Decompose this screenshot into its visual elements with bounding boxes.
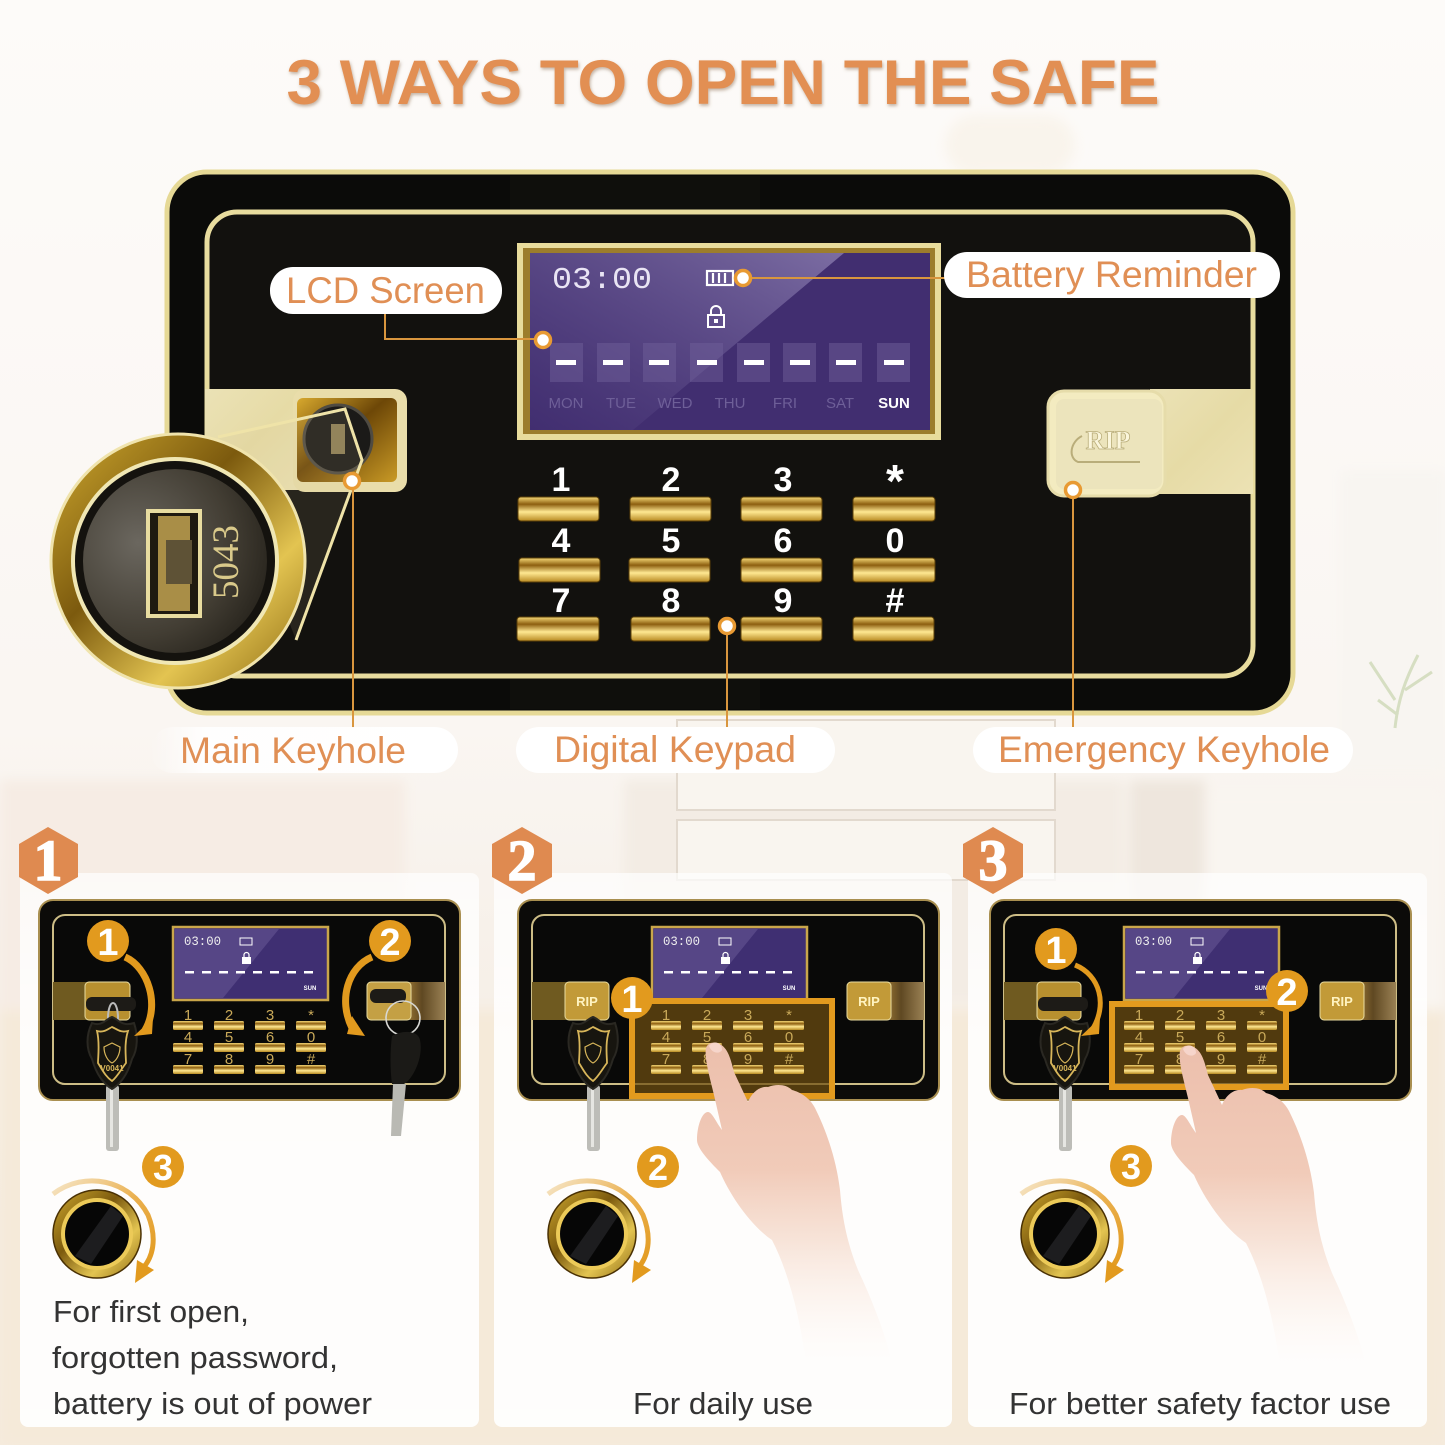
step 2: 2 — [379, 922, 401, 964]
description: forgotten password, — [52, 1340, 338, 1375]
weekday row: WED — [658, 395, 693, 412]
label: LCD screen — [270, 267, 550, 348]
key left — [86, 997, 137, 1151]
small safe panel: 7 — [1135, 1051, 1143, 1068]
description: For daily use — [633, 1386, 813, 1421]
turn arrow 1 — [125, 957, 153, 1036]
small safe panel: RIP — [858, 994, 880, 1009]
small safe panel: 2 — [1176, 1007, 1184, 1024]
description — [52, 1294, 372, 1421]
small safe panel: RIP — [576, 994, 598, 1009]
step 2: 2 — [1276, 972, 1298, 1014]
small safe panel: * — [308, 1007, 314, 1024]
small safe panel: 5 — [225, 1029, 233, 1046]
turn arrow 2 — [346, 957, 372, 1036]
keypad digits: 8 — [662, 582, 680, 620]
keypad buttons — [517, 497, 935, 641]
small safe panel: 1 — [662, 1007, 670, 1024]
keypad highlight — [1112, 1004, 1286, 1087]
small safe panel: 5 — [703, 1029, 711, 1046]
title: 3 WAYS TO OPEN THE SAFE — [286, 48, 1160, 118]
keypad digits: 2 — [662, 461, 680, 499]
small safe panel: 6 — [1217, 1029, 1225, 1046]
small safe panel: * — [786, 1007, 792, 1024]
key: V0041 — [1053, 1064, 1077, 1073]
step 3: 3 — [1121, 1146, 1141, 1187]
serial number: 5043 — [206, 525, 247, 599]
step 1: 1 — [97, 922, 119, 964]
small safe panel: 7 — [662, 1051, 670, 1068]
small safe panel: SUN — [1255, 986, 1267, 992]
key — [568, 1017, 618, 1151]
keypad highlight — [632, 1001, 832, 1096]
zoom cone — [218, 409, 362, 640]
panel: method 1 — [19, 827, 479, 1427]
label: digital keypad: Digital Keypad — [554, 729, 796, 770]
step 3: 3 — [153, 1147, 173, 1188]
keypad digits: 9 — [774, 582, 792, 620]
lock icon — [708, 306, 724, 327]
description: battery is out of power — [53, 1386, 372, 1421]
weekday row — [548, 395, 910, 412]
keypad digits: # — [886, 582, 905, 620]
small safe panel: 1 — [1135, 1007, 1143, 1024]
left gold band — [205, 389, 305, 490]
method badge 2 — [492, 827, 552, 894]
dial with rotation arrow — [1021, 1181, 1124, 1283]
inner gold frame — [207, 212, 1253, 676]
small safe panel: # — [785, 1051, 794, 1068]
small safe panel: 8 — [1176, 1051, 1184, 1068]
method badge 2: 2 — [508, 828, 536, 893]
small safe panel: 0 — [1258, 1029, 1266, 1046]
step 2 — [1266, 970, 1308, 1014]
main keyhole plate — [293, 389, 407, 492]
card background — [20, 873, 479, 1427]
label: emergency keyhole: Emergency Keyhole — [998, 729, 1330, 770]
emergency keyhole cover — [1048, 391, 1165, 496]
hand — [1171, 1046, 1366, 1365]
card background — [494, 873, 952, 1427]
panel: method 2 — [492, 827, 952, 1427]
faint segment blocks — [550, 343, 910, 382]
small safe panel — [990, 900, 1411, 1100]
small safe panel: 2 — [225, 1007, 233, 1024]
small safe panel: 8 — [225, 1051, 233, 1068]
small safe panel: 3 — [1217, 1007, 1225, 1024]
dial with rotation arrow — [548, 1181, 651, 1283]
small safe panel: 3 — [744, 1007, 752, 1024]
keypad digits: 4 — [552, 522, 571, 560]
small safe panel: 03:00 — [663, 934, 700, 949]
small safe panel — [39, 900, 460, 1100]
small safe panel: 9 — [744, 1051, 752, 1068]
small safe panel: 3 — [266, 1007, 274, 1024]
key slot — [148, 511, 200, 616]
key right — [370, 989, 421, 1136]
step 2: 2 — [648, 1147, 668, 1188]
step 3 — [1110, 1145, 1152, 1187]
magnified keyhole callout — [51, 409, 362, 688]
small safe panel: 6 — [266, 1029, 274, 1046]
step 1: 1 — [1045, 930, 1067, 972]
label: emergency keyhole — [973, 482, 1353, 773]
weekday row: THU — [715, 395, 745, 412]
small safe panel: 03:00 — [1135, 934, 1172, 949]
label: LCD screen: LCD Screen — [286, 270, 485, 311]
small safe panel: 4 — [1135, 1029, 1143, 1046]
step 1: 1 — [621, 979, 643, 1021]
weekday row: SAT — [826, 395, 854, 412]
keypad digits — [552, 455, 905, 620]
small safe panel — [518, 900, 939, 1100]
keypad digits: 3 — [774, 461, 792, 499]
keypad digits: 6 — [774, 522, 792, 560]
method badge 1 — [19, 827, 78, 894]
weekday row: FRI — [773, 395, 797, 412]
step 3 — [142, 1146, 184, 1188]
small safe panel: 03:00 — [184, 934, 221, 949]
sheen band — [510, 176, 760, 709]
emergency keyhole cover: RIP — [1086, 426, 1131, 455]
right gold band — [1150, 389, 1253, 494]
small safe panel: 8 — [703, 1051, 711, 1068]
small safe panel: # — [1258, 1051, 1267, 1068]
small safe panel: 0 — [785, 1029, 793, 1046]
key left: V0041 — [100, 1064, 124, 1073]
small safe panel: 7 — [184, 1051, 192, 1068]
small safe panel: 9 — [266, 1051, 274, 1068]
panel: method 3 — [963, 827, 1427, 1427]
small safe panel: SUN — [783, 986, 795, 992]
battery icon — [707, 271, 733, 285]
clock readout: 03:00 — [552, 263, 652, 298]
label: battery reminder: Battery Reminder — [966, 254, 1257, 295]
keypad digits: 7 — [552, 582, 570, 620]
step 2 — [637, 1146, 679, 1188]
description: For first open, — [53, 1294, 249, 1329]
small safe panel: 2 — [703, 1007, 711, 1024]
step 2 — [369, 920, 411, 964]
weekday row: TUE — [606, 395, 636, 412]
keypad digits: 5 — [662, 522, 680, 560]
card background — [968, 873, 1427, 1427]
method badge 3 — [963, 827, 1023, 894]
step 1 — [611, 977, 653, 1021]
key — [1038, 997, 1090, 1151]
dash readouts — [556, 360, 904, 365]
hand — [697, 1043, 892, 1362]
small safe panel: 0 — [307, 1029, 315, 1046]
label: battery reminder — [736, 252, 1280, 298]
weekday row: SUN — [878, 395, 910, 412]
turn arrow — [1075, 965, 1100, 1036]
small safe panel: 4 — [184, 1029, 192, 1046]
keypad digits: 1 — [552, 461, 570, 499]
step 1 — [87, 920, 129, 964]
method badge 3: 3 — [978, 828, 1008, 893]
dial with rotation arrow — [53, 1181, 154, 1283]
keypad digits: * — [886, 455, 904, 507]
label: main keyhole — [150, 474, 458, 773]
LCD screen — [517, 243, 941, 440]
small safe panel: * — [1259, 1007, 1265, 1024]
label: digital keypad — [516, 618, 835, 773]
small safe panel: RIP — [1331, 994, 1353, 1009]
panel body — [167, 172, 1293, 713]
weekday row: MON — [548, 395, 584, 412]
step 1 — [1035, 928, 1077, 972]
small safe panel: SUN — [304, 986, 316, 992]
small safe panel: 1 — [184, 1007, 192, 1024]
small safe panel: 9 — [1217, 1051, 1225, 1068]
main safe control panel — [167, 172, 1293, 713]
small safe panel: 4 — [662, 1029, 670, 1046]
method badge 1: 1 — [34, 828, 62, 893]
keypad digits: 0 — [886, 522, 904, 560]
small safe panel: # — [307, 1051, 316, 1068]
description: For better safety factor use — [1009, 1386, 1391, 1421]
label: main keyhole: Main Keyhole — [180, 730, 406, 771]
small safe panel: 5 — [1176, 1029, 1184, 1046]
small safe panel: 6 — [744, 1029, 752, 1046]
